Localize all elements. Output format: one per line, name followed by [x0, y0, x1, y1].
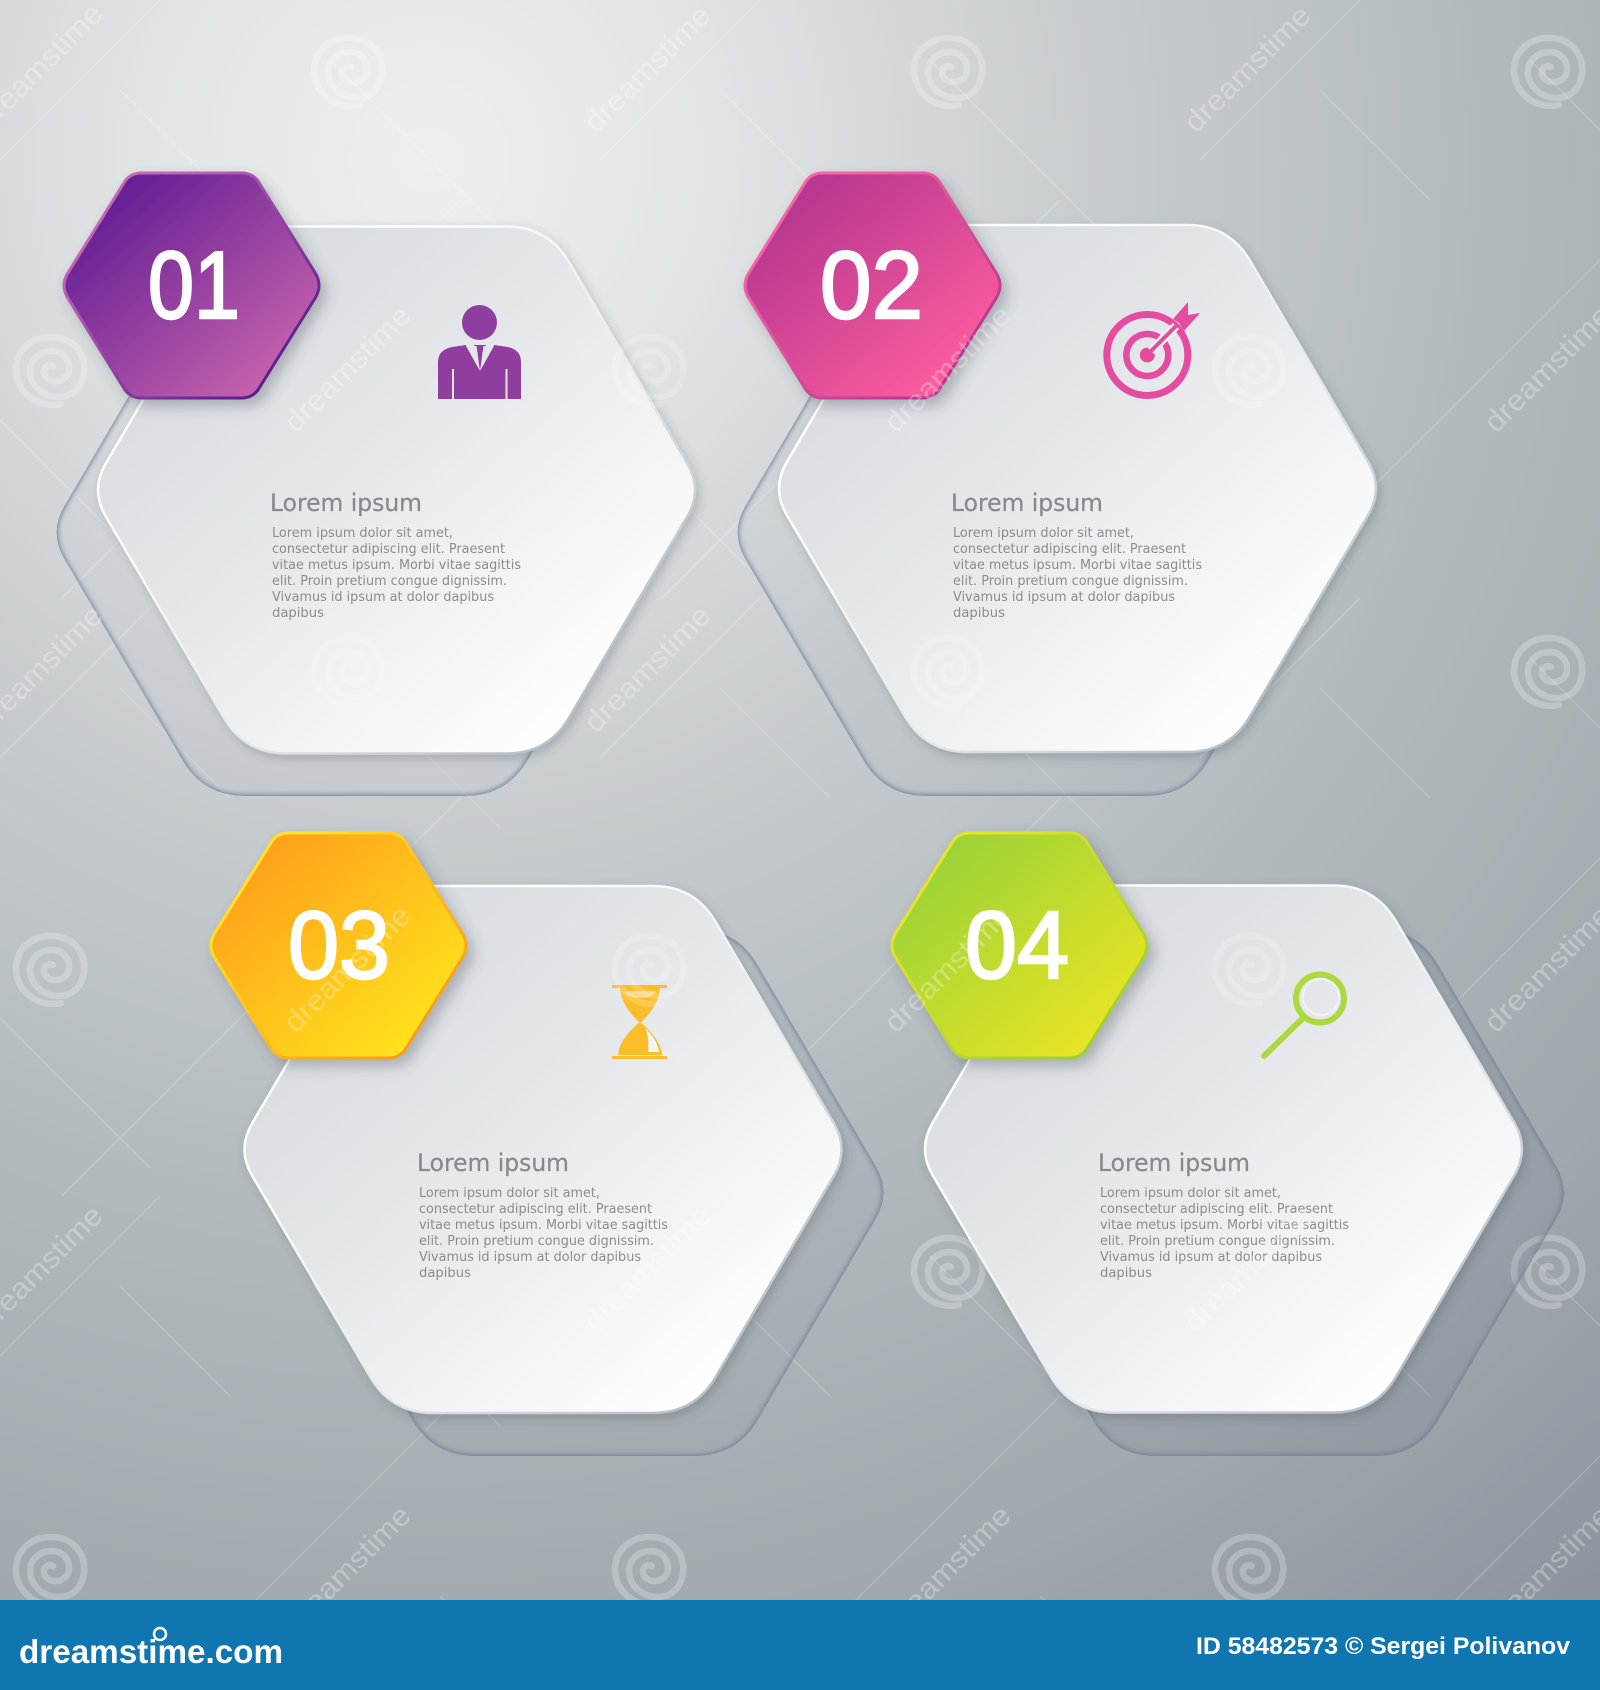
text: step 01: Lorem ipsum dolor sit amet, — [272, 525, 453, 541]
text: step 01: vitae metus ipsum. Morbi vitae sagittis — [272, 557, 521, 573]
text: step 03: Lorem ipsum dolor sit amet, — [419, 1185, 600, 1201]
text: step 03: consectetur adipiscing elit. Praesent — [419, 1201, 652, 1217]
icon: hourglass — [612, 985, 667, 1059]
text: step 04: elit. Proin pretium congue dignissim. — [1100, 1233, 1335, 1249]
badge 02 — [745, 173, 1000, 398]
text: step 02: consectetur adipiscing elit. Praesent — [953, 541, 1186, 557]
text: step 04: Vivamus id ipsum at dolor dapibus — [1100, 1249, 1322, 1265]
panel: step 03 — [211, 833, 884, 1456]
text: step 04: vitae metus ipsum. Morbi vitae sagittis — [1100, 1217, 1349, 1233]
icon: magnifying glass — [1264, 974, 1344, 1056]
back hexagon 01 — [56, 269, 654, 796]
panel: step 01 — [56, 173, 695, 796]
text: step 02: vitae metus ipsum. Morbi vitae sagittis — [953, 557, 1202, 573]
watermark text: dreamstime — [878, 299, 1018, 439]
text: step 03: Lorem ipsum — [417, 1149, 569, 1177]
panel: step 04 — [892, 833, 1564, 1456]
text: step 04: consectetur adipiscing elit. Praesent — [1100, 1201, 1333, 1217]
badge 01: 01 — [148, 232, 240, 339]
watermark spirals over cards — [314, 337, 1283, 1004]
watermark text: dreamstime — [1178, 0, 1318, 139]
text: step 04: Lorem ipsum — [1098, 1149, 1250, 1177]
watermark text: dreamstime — [878, 899, 1018, 1039]
panel: step 02 — [738, 173, 1376, 796]
text: step 01: elit. Proin pretium congue dignissim. — [272, 573, 507, 589]
watermark text: dreamstime — [1178, 1199, 1318, 1339]
text: step 02: Lorem ipsum dolor sit amet, — [953, 525, 1134, 541]
text: step 03 — [417, 1149, 668, 1281]
logo: dreamstime.com — [19, 1633, 283, 1670]
text: step 01: dapibus — [272, 605, 324, 621]
badge 03: 03 — [288, 892, 390, 999]
card 04 — [925, 886, 1522, 1412]
icon: businessman — [438, 305, 521, 399]
badge 04: 04 — [965, 892, 1069, 999]
text: step 02: dapibus — [953, 605, 1005, 621]
text: step 04: Lorem ipsum dolor sit amet, — [1100, 1185, 1281, 1201]
text: step 01: Vivamus id ipsum at dolor dapibus — [272, 589, 494, 605]
text: step 02: elit. Proin pretium congue dignissim. — [953, 573, 1188, 589]
watermark text: dreamstime — [278, 1499, 418, 1639]
back hexagon 03 — [286, 929, 884, 1456]
image credit: ID 58482573 © Sergei Polivanov — [1196, 1633, 1571, 1660]
watermark text: dreamstime — [578, 1199, 718, 1339]
badge 02: 02 — [820, 232, 923, 339]
badge 04 — [892, 833, 1147, 1058]
text: step 01 — [270, 489, 521, 621]
text: step 01: consectetur adipiscing elit. Praesent — [272, 541, 505, 557]
icon: target with arrow — [1107, 302, 1200, 396]
watermark text: dreamstime — [278, 299, 418, 439]
text: step 03: elit. Proin pretium congue dignissim. — [419, 1233, 654, 1249]
back hexagon 04 — [967, 929, 1564, 1456]
text: step 02 — [951, 489, 1202, 621]
text: step 01: Lorem ipsum — [270, 489, 422, 517]
card 01 — [98, 226, 695, 754]
text: step 03: dapibus — [419, 1265, 471, 1281]
text: step 04 — [1098, 1149, 1349, 1281]
back hexagon 02 — [738, 269, 1334, 796]
watermark text: dreamstime — [578, 0, 718, 139]
text: step 04: dapibus — [1100, 1265, 1152, 1281]
watermark text: dreamstime — [278, 899, 418, 1039]
text: step 02: Lorem ipsum — [951, 489, 1103, 517]
watermark text: dreamstime — [1178, 599, 1318, 739]
text: step 03: vitae metus ipsum. Morbi vitae sagittis — [419, 1217, 668, 1233]
text: step 03: Vivamus id ipsum at dolor dapibus — [419, 1249, 641, 1265]
card 02 — [779, 225, 1376, 752]
footer banner — [0, 1600, 1600, 1690]
watermark text: dreamstime — [578, 599, 718, 739]
badge 03 — [211, 833, 466, 1058]
card 03 — [244, 886, 842, 1413]
badge 01 — [64, 173, 319, 398]
watermark text: dreamstime — [878, 1499, 1018, 1639]
text: step 02: Vivamus id ipsum at dolor dapibus — [953, 589, 1175, 605]
